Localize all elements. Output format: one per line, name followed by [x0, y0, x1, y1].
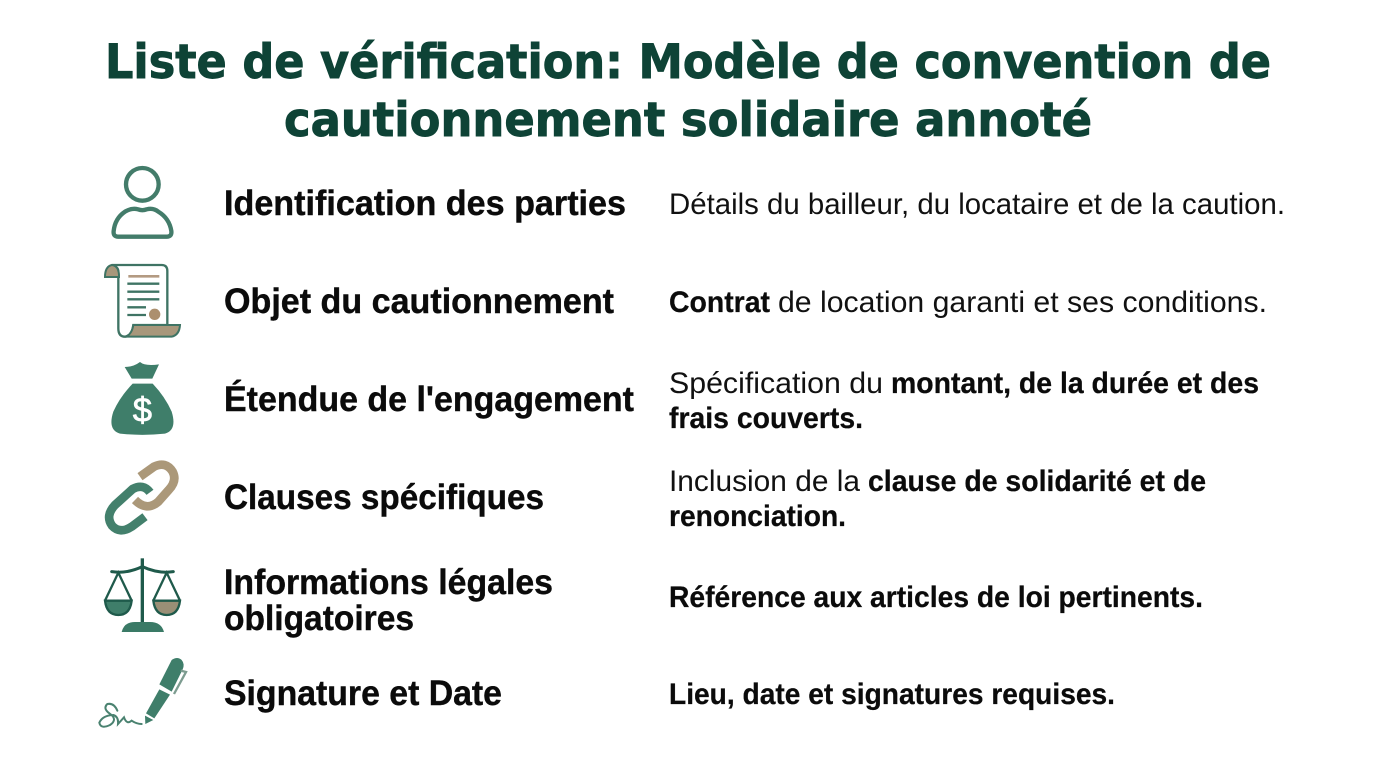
icon: scroll contract	[105, 265, 180, 337]
description: Contrat	[669, 286, 770, 319]
icon: scales of justice	[105, 558, 180, 632]
row: informations légales obligatoires	[105, 558, 1203, 638]
row: étendue de l'engagement	[111, 362, 1259, 435]
description: clause de solidarité et de	[868, 465, 1206, 498]
description: Détails du bailleur, du locataire et de la caution.	[669, 188, 1285, 221]
title: cautionnement solidaire annoté	[284, 93, 1092, 148]
heading: Objet du cautionnement	[224, 282, 614, 321]
heading: Clauses spécifiques	[224, 478, 544, 517]
description	[669, 367, 1259, 435]
heading: obligatoires	[224, 599, 414, 638]
description: Inclusion de la	[669, 465, 860, 498]
title	[105, 35, 1271, 148]
heading	[224, 563, 553, 638]
icon: money bag	[111, 362, 173, 435]
heading: Signature et Date	[224, 674, 502, 713]
description: Référence aux articles de loi pertinents.	[669, 581, 1203, 614]
icon: chain links	[109, 465, 174, 530]
heading: Informations légales	[224, 563, 553, 602]
icon: pen with signature	[99, 658, 186, 727]
description: renonciation.	[669, 500, 846, 533]
title: Liste de vérification: Modèle de convention de	[105, 35, 1271, 90]
description: montant, de la durée et des	[891, 367, 1259, 400]
icon: person	[114, 168, 171, 237]
row: identification des parties	[114, 168, 1285, 237]
heading: Étendue de l'engagement	[224, 379, 634, 419]
description: Lieu, date et signatures requises.	[669, 678, 1115, 711]
heading: Identification des parties	[224, 184, 626, 223]
icon: money bag: $	[133, 391, 152, 429]
description	[669, 465, 1206, 533]
row: signature et date	[99, 658, 1115, 727]
description: Spécification du	[669, 367, 883, 400]
description: de location garanti et ses conditions.	[778, 286, 1267, 319]
row: clauses spécifiques	[109, 465, 1206, 533]
row: objet du cautionnement	[105, 265, 1267, 337]
description: frais couverts.	[669, 402, 863, 435]
